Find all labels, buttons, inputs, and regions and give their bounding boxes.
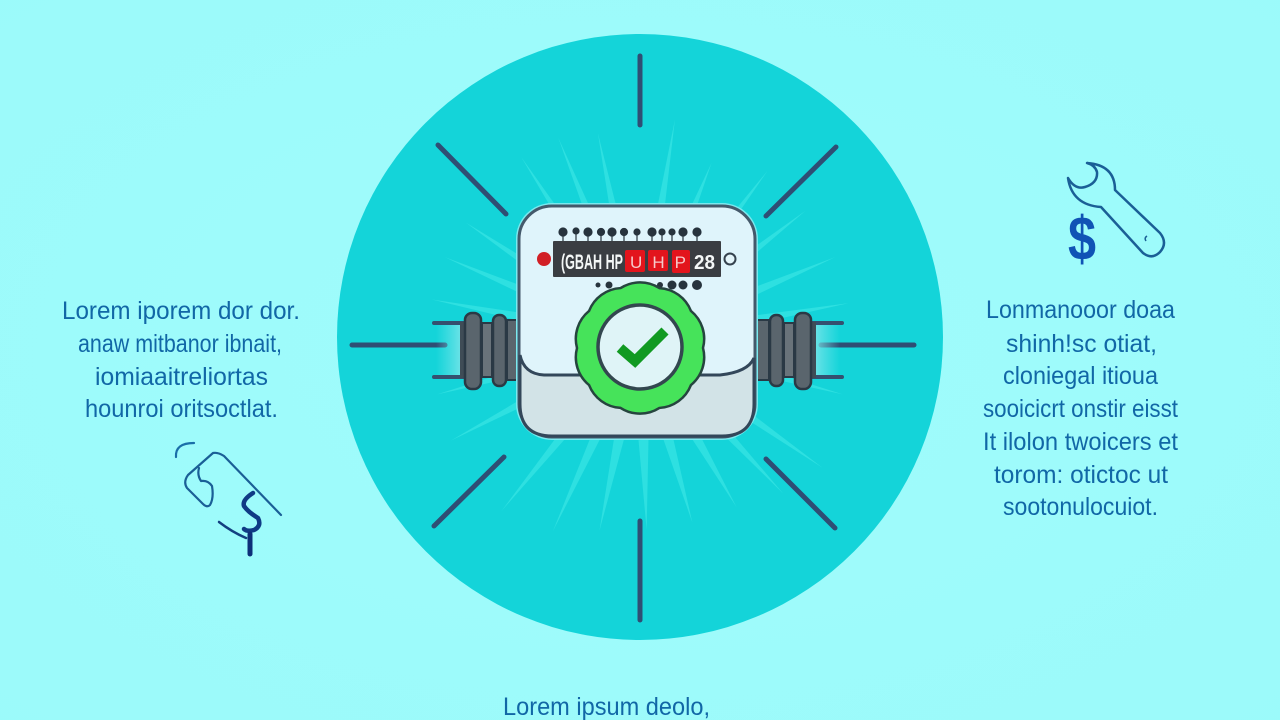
right text block: shinh!sc otiat, bbox=[1006, 330, 1157, 358]
left text block: hounroi oritsoctlat. bbox=[85, 395, 278, 423]
right text block: cloniegal itioua bbox=[1003, 362, 1158, 390]
central teal circle bbox=[337, 34, 943, 640]
left text block bbox=[62, 297, 300, 423]
digital display bbox=[553, 241, 721, 277]
icon: wrench and dollar bbox=[1068, 163, 1164, 274]
right text block: sootonulocuiot. bbox=[1003, 493, 1158, 521]
right text block: It ilolon twoicers et bbox=[983, 428, 1178, 456]
digital display: (GBAH HP bbox=[561, 251, 623, 274]
left text block: iomiaaitreliortas bbox=[95, 363, 268, 391]
digital display: 28 bbox=[694, 252, 715, 274]
left pipe connector bbox=[434, 313, 521, 389]
radiating light rays bbox=[431, 119, 850, 533]
icon: price tag with dollar bbox=[176, 443, 281, 554]
eight radial tick lines bbox=[352, 56, 914, 620]
digital display: UHP bbox=[630, 253, 686, 272]
right text block: Lonmanooor doaa bbox=[986, 296, 1175, 324]
icon: wrench and dollar: $ bbox=[1068, 205, 1096, 274]
left text block: Lorem iporem dor dor. bbox=[62, 297, 300, 325]
meter body bbox=[516, 203, 758, 440]
right pipe connector bbox=[755, 313, 842, 389]
top row of dots bbox=[559, 228, 701, 241]
right text block: torom: otictoc ut bbox=[994, 461, 1168, 489]
red indicator light bbox=[537, 252, 551, 266]
bottom row of dots bbox=[596, 280, 702, 290]
small dial icon bbox=[724, 254, 736, 264]
left text block: anaw mitbanor ibnait, bbox=[78, 330, 282, 358]
green check badge bbox=[558, 267, 722, 429]
right text block bbox=[983, 296, 1178, 521]
right text block: sooicicrt onstir eisst bbox=[983, 395, 1178, 423]
